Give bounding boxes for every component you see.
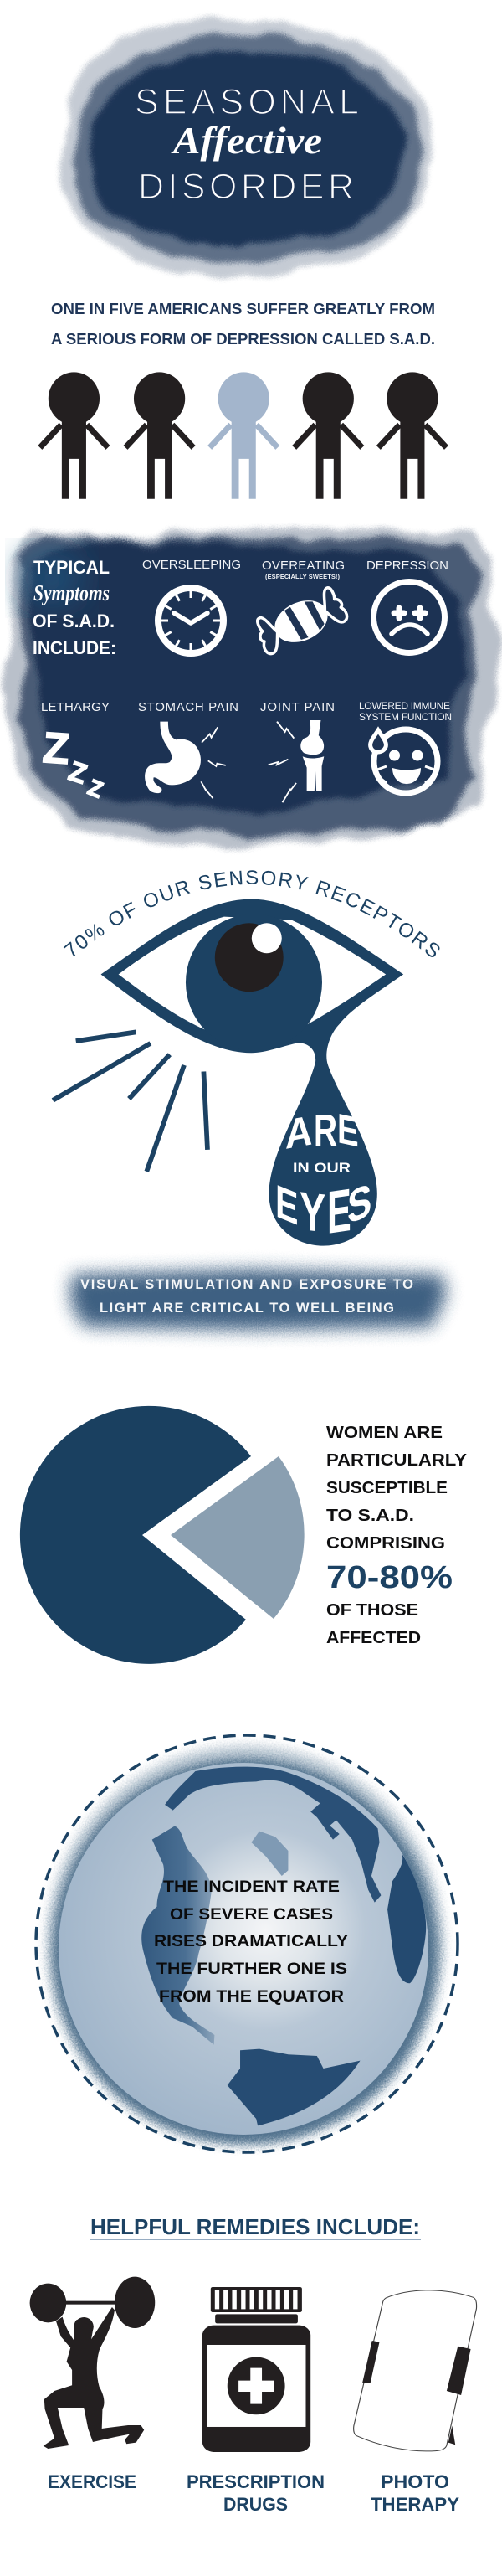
banner text: LIGHT ARE CRITICAL TO WELL BEING	[100, 1301, 394, 1316]
icon: knee joint	[269, 720, 324, 802]
land: southern continent	[228, 2049, 361, 2125]
symptom labels: SYSTEM FUNCTION	[359, 711, 452, 723]
women text: OF THOSE	[326, 1600, 418, 1620]
icon: light therapy lamp	[354, 2290, 477, 2451]
globe text: FROM THE EQUATOR	[159, 1987, 344, 2006]
tear text: A	[285, 1107, 312, 1158]
panel: title watercolor	[62, 20, 432, 277]
globe text: RISES DRAMATICALLY	[154, 1932, 348, 1950]
icon: sleeping Z letters: Z	[85, 775, 106, 803]
icon: eye with tear	[101, 899, 403, 1246]
globe text	[154, 1878, 348, 2006]
intro text: ONE IN FIVE AMERICANS SUFFER GREATLY FROM	[51, 301, 435, 317]
tear text	[275, 1104, 371, 1247]
icon: candy	[253, 585, 350, 657]
tear text: S	[347, 1173, 371, 1234]
land: centre island	[251, 1832, 288, 1876]
tear text: E	[337, 1104, 359, 1157]
symptom labels: JOINT PAIN	[260, 700, 335, 714]
remedy labels: EXERCISE	[48, 2471, 136, 2492]
panel: typical symptoms	[0, 528, 499, 848]
icon: clock	[158, 588, 223, 653]
pie chart	[20, 1406, 305, 1664]
banner: visual stimulation	[70, 1270, 447, 1330]
remedies heading: HELPFUL REMEDIES INCLUDE:	[90, 2214, 420, 2239]
intro text	[51, 301, 435, 348]
remedy labels: PRESCRIPTION	[187, 2471, 325, 2492]
icon: stomach	[145, 722, 226, 798]
banner text: VISUAL STIMULATION AND EXPOSURE TO	[80, 1277, 413, 1292]
symptom labels: (ESPECIALLY SWEETS!)	[265, 573, 340, 580]
remedy labels: THERAPY	[371, 2494, 459, 2515]
icon: sleeping Z letters: Z	[41, 724, 71, 774]
tear text: IN OUR	[293, 1161, 351, 1176]
remedy labels: PHOTO	[381, 2471, 449, 2492]
banner text	[80, 1277, 413, 1316]
symptoms heading	[33, 557, 116, 658]
section: globe	[36, 1735, 458, 2152]
land: northern band	[165, 1767, 381, 1903]
symptom labels: LOWERED IMMUNE	[359, 700, 450, 712]
symptom labels: LETHARGY	[41, 700, 110, 714]
globe outer haze	[46, 1745, 444, 2144]
symptoms heading: TYPICAL	[33, 557, 110, 578]
icon: sleeping Z letters: Z	[65, 755, 90, 790]
title text	[135, 82, 359, 207]
symptoms heading: Symptoms	[33, 580, 110, 605]
women text: TO S.A.D.	[326, 1506, 414, 1525]
icon: sick face with mask	[371, 729, 438, 793]
symptom labels: DEPRESSION	[366, 559, 448, 573]
land: right continent	[387, 1853, 426, 1983]
tear text: E	[327, 1176, 351, 1247]
icon: pill bottle	[202, 2287, 310, 2452]
section: eye	[52, 870, 440, 1247]
women text: AFFECTED	[326, 1628, 421, 1647]
person 1	[40, 372, 108, 499]
title wash	[62, 20, 432, 277]
women text: 70-80%	[326, 1560, 453, 1595]
icon: weightlifter	[30, 2277, 155, 2449]
globe text: OF SEVERE CASES	[170, 1905, 333, 1924]
women text: COMPRISING	[326, 1533, 445, 1553]
people row: one in five	[40, 372, 446, 499]
icon: sleeping Z letters	[41, 724, 106, 803]
symptoms heading: INCLUDE:	[33, 637, 116, 658]
person 4	[295, 372, 362, 499]
remedy labels: DRUGS	[223, 2494, 288, 2515]
title text: SEASONAL	[135, 82, 359, 122]
person 3 highlighted	[210, 372, 278, 499]
section: remedies	[30, 2214, 477, 2515]
symptom labels: OVEREATING	[262, 559, 345, 573]
tear text: Y	[300, 1182, 325, 1244]
globe sphere	[59, 1763, 428, 2135]
globe halo	[53, 1759, 438, 2144]
women text: PARTICULARLY	[326, 1450, 467, 1470]
tear text: R	[314, 1105, 337, 1155]
title text: DISORDER	[138, 167, 354, 207]
women text: SUSCEPTIBLE	[326, 1478, 448, 1497]
symptoms wash	[0, 528, 499, 848]
curved heading: 70% OF OUR SENSORY RECEPTORS	[64, 870, 440, 957]
person 2	[126, 372, 193, 499]
symptoms heading: OF S.A.D.	[33, 611, 115, 631]
continents	[141, 1767, 426, 2125]
tear text: E	[275, 1175, 299, 1235]
globe text: THE FURTHER ONE IS	[156, 1960, 347, 1978]
women text: WOMEN ARE	[326, 1423, 443, 1442]
title text: Affective	[171, 120, 322, 162]
dashed orbit	[36, 1735, 458, 2152]
globe text: THE INCIDENT RATE	[163, 1878, 340, 1896]
symptom labels	[41, 558, 452, 723]
remedy labels	[48, 2471, 459, 2515]
women text	[326, 1423, 467, 1647]
person 5	[378, 372, 446, 499]
symptom labels: STOMACH PAIN	[138, 700, 238, 714]
intro text: A SERIOUS FORM OF DEPRESSION CALLED S.A.D.	[51, 331, 435, 348]
icon: sad face	[373, 581, 445, 653]
section: women stat	[20, 1406, 467, 1664]
symptom labels: OVERSLEEPING	[142, 558, 241, 572]
banner wash	[70, 1270, 447, 1330]
land: left continent	[141, 1826, 214, 2045]
light rays	[53, 1032, 207, 1172]
